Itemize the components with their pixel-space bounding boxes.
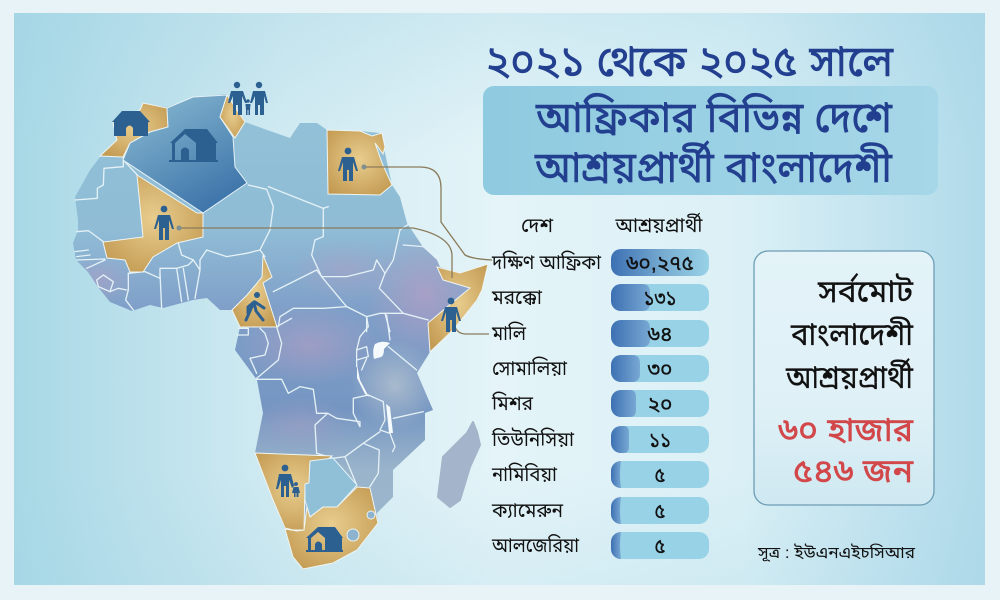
table: Egypt row: মিশর	[491, 391, 534, 415]
table: South Africa row: ৬০,২৭৫	[626, 252, 694, 275]
country: Morocco	[100, 103, 168, 157]
country borders	[75, 157, 440, 487]
icon: person Egypt	[338, 148, 358, 181]
icon: walking person Cameroon	[246, 292, 264, 320]
table header	[521, 211, 703, 237]
icon: person Somalia	[441, 298, 461, 332]
total callout panel: ৫৪৬ জন	[793, 452, 914, 489]
icon: house South Africa	[306, 527, 343, 552]
table header: দেশ	[521, 215, 553, 237]
table: Namibia row: নামিবিয়া	[491, 462, 558, 486]
table: Cameroon row	[491, 497, 709, 524]
table: Algeria row: আলজেরিয়া	[491, 533, 580, 557]
title line 1: ২০২১ থেকে ২০২৫ সালে	[485, 38, 894, 86]
table: Tunisia row: ১১	[649, 429, 671, 452]
table: Morocco row: ১৩১	[644, 287, 676, 310]
country: Algeria	[123, 95, 247, 213]
total callout panel	[754, 251, 934, 505]
table: Mali row	[491, 320, 709, 347]
table: South Africa row	[491, 249, 709, 276]
map of Africa	[73, 94, 488, 570]
lakes	[357, 342, 393, 433]
table: Somalia row: ৩০	[648, 358, 672, 381]
source: সূত্র : ইউএনএইচসিআর	[757, 543, 915, 562]
table: Namibia row	[491, 461, 709, 488]
icon: family Tunisia	[228, 82, 268, 115]
table: Mali row: ৬৪	[648, 323, 672, 346]
icon: adult and child Namibia	[276, 465, 300, 497]
total callout panel: বাংলাদেশী	[790, 317, 914, 352]
table header: আশ্রয়প্রার্থী	[615, 211, 703, 237]
table: Algeria row: ৫	[654, 535, 666, 558]
continent base	[73, 94, 469, 529]
table: Namibia row: ৫	[654, 464, 666, 487]
icon: house Morocco	[112, 111, 150, 136]
country: Namibia	[255, 453, 332, 530]
total callout panel: সর্বমোট	[817, 273, 914, 309]
country: Lesotho	[347, 529, 359, 541]
title	[483, 38, 938, 195]
table: Morocco row	[491, 284, 709, 311]
country: Egypt	[327, 130, 392, 195]
country: Eswatini	[367, 511, 375, 519]
table: Egypt row	[491, 390, 709, 417]
country: Botswana	[305, 458, 357, 517]
title panel: আশ্রয়প্রার্থী বাংলাদেশী	[534, 140, 893, 192]
leader lines	[176, 164, 492, 334]
table: Egypt row: ২০	[648, 393, 672, 416]
table: Algeria row	[491, 532, 709, 559]
icon: house Algeria	[169, 129, 218, 162]
table: Tunisia row	[491, 426, 709, 453]
total callout panel: ৬০ হাজার	[778, 411, 913, 448]
icon: person Mali	[154, 206, 174, 240]
country: Tunisia	[220, 95, 245, 138]
country: Cameroon	[232, 255, 277, 327]
table: Mali row: মালি	[491, 321, 526, 345]
title panel: আফ্রিকার বিভিন্ন দেশে	[535, 92, 893, 142]
table: Tunisia row: তিউনিসিয়া	[491, 427, 575, 451]
country: South Africa	[285, 487, 378, 569]
table: Somalia row	[492, 355, 709, 382]
table: South Africa row: দক্ষিণ আফ্রিকা	[491, 250, 602, 274]
table: Cameroon row: ৫	[654, 500, 666, 523]
table: Somalia row: সোমালিয়া	[492, 356, 568, 380]
table: Morocco row: মরক্কো	[491, 287, 543, 309]
title panel	[483, 86, 938, 195]
Madagascar	[438, 422, 480, 507]
country: Mali	[103, 175, 203, 272]
total callout panel: আশ্রয়প্রার্থী	[785, 358, 914, 395]
country: Somalia	[428, 264, 488, 352]
table: Cameroon row: ক্যামেরুন	[491, 500, 564, 522]
